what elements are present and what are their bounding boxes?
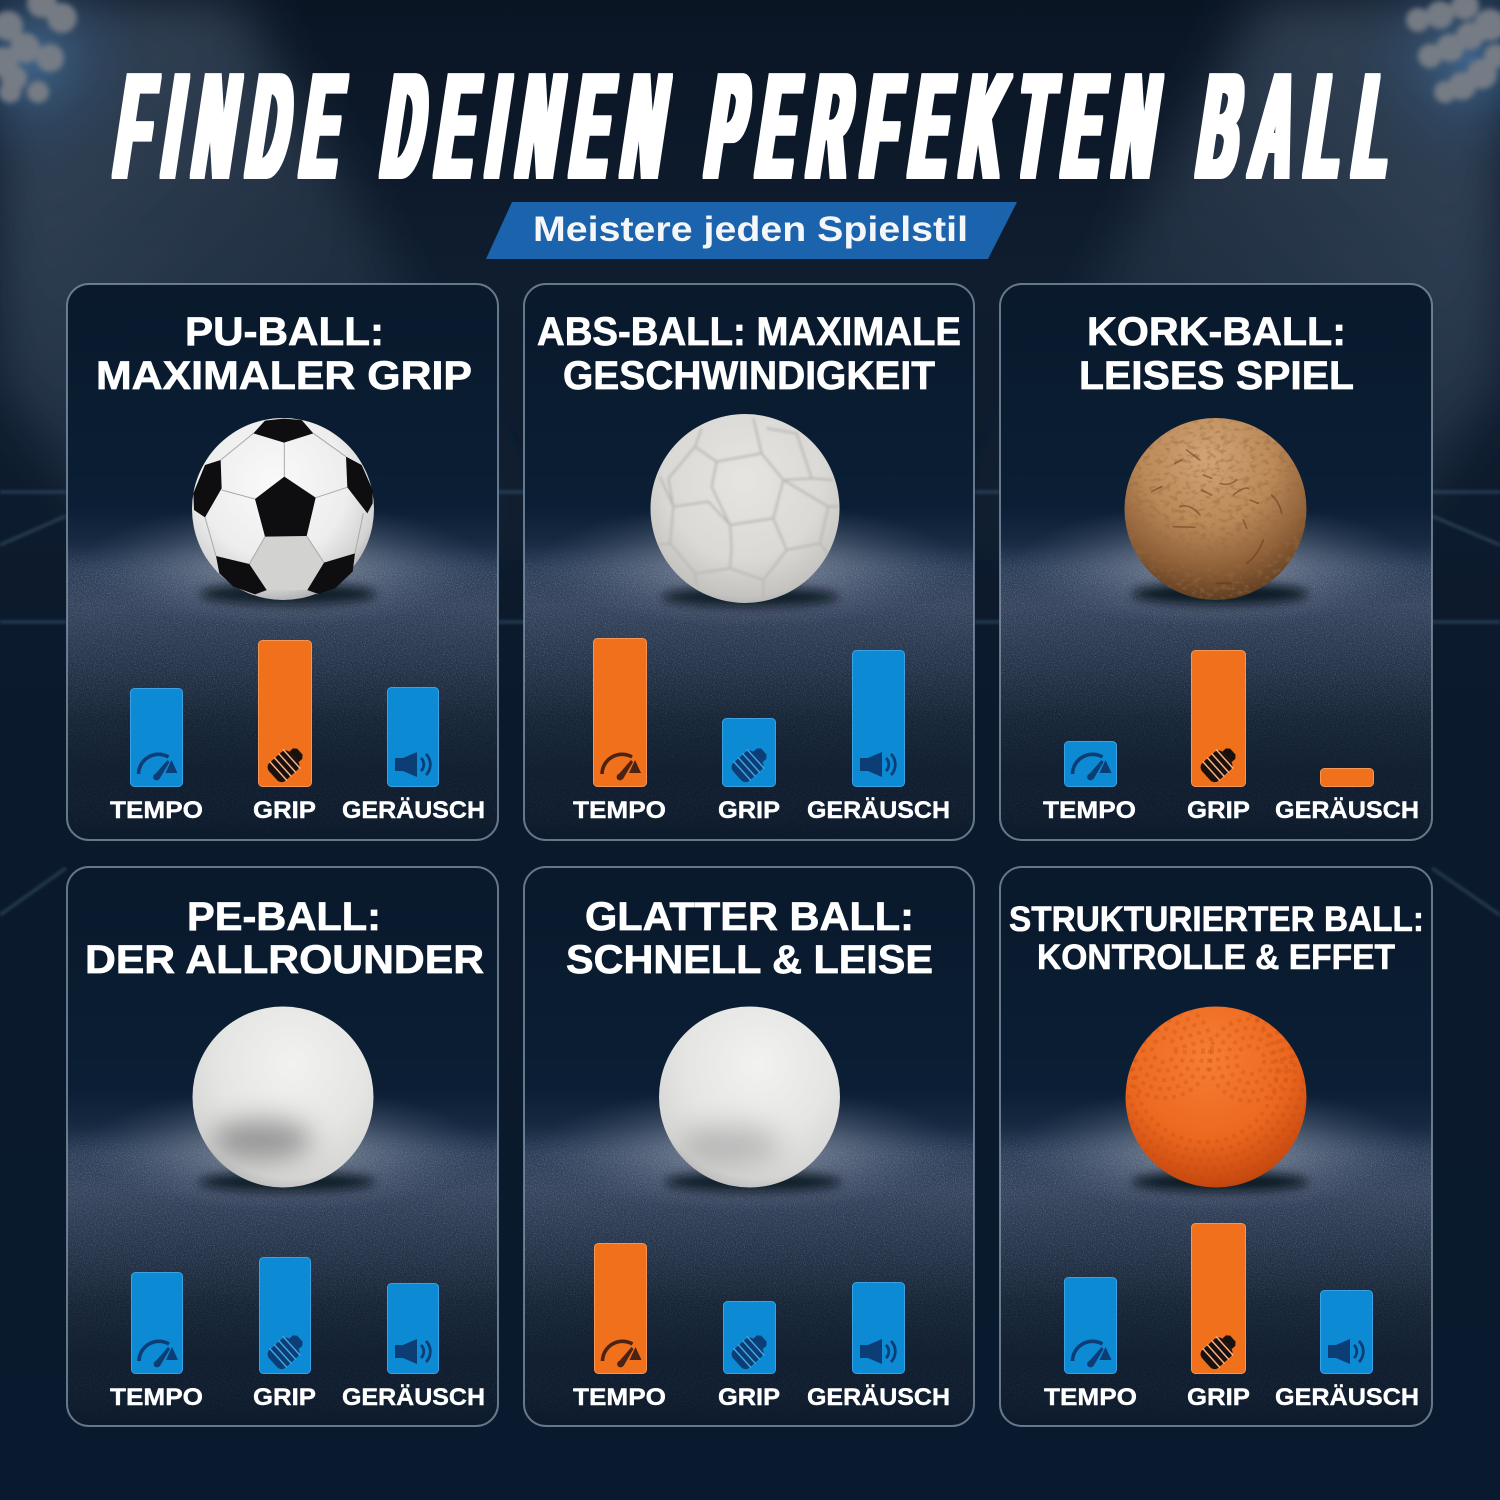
bar: tempo [573, 638, 666, 824]
heading: PE-BALL: [187, 895, 381, 939]
bar: grip [253, 1258, 316, 1411]
panel: PE-Ball [67, 867, 498, 1426]
icon: grip [728, 1329, 773, 1372]
icon: gauge [1072, 754, 1112, 780]
panel: PU-Ball [67, 284, 498, 840]
bar: tempo: TEMPO [1043, 797, 1136, 824]
bar: geraeusch: GERÄUSCH [807, 1384, 950, 1411]
bar: grip [1187, 650, 1250, 824]
bar: grip [718, 718, 780, 824]
bar: grip: GRIP [253, 1384, 316, 1411]
panel: ABS-Ball [524, 284, 974, 840]
title: FINDE DEINEN PERFEKTEN BALL [107, 43, 1403, 209]
bar: grip [718, 1302, 780, 1411]
bar: grip: GRIP [718, 797, 780, 824]
icon: speaker [860, 1339, 895, 1364]
ball: white PE ball [192, 1006, 375, 1192]
panel: glatter Ball [524, 867, 974, 1426]
ball: textured orange ball [1126, 1006, 1312, 1199]
bar: grip: GRIP [253, 797, 316, 824]
bar: grip [253, 640, 316, 824]
heading: LEISES SPIEL [1079, 354, 1354, 398]
bar: geraeusch: GERÄUSCH [342, 1384, 485, 1411]
heading: DER ALLROUNDER [85, 938, 484, 982]
bar: tempo: TEMPO [573, 797, 666, 824]
bar: grip: GRIP [718, 1384, 780, 1411]
bar: tempo [1044, 1278, 1137, 1411]
ball: white ABS ball [650, 414, 840, 607]
heading [85, 895, 484, 982]
icon: grip [728, 742, 773, 785]
panel: Kork-Ball [1000, 284, 1432, 840]
bar: tempo [573, 1244, 666, 1411]
bar: grip: GRIP [1187, 797, 1250, 824]
bar: tempo: TEMPO [573, 1384, 666, 1411]
bar: tempo [1043, 742, 1136, 824]
heading: KORK-BALL: [1087, 310, 1346, 354]
bar: geraeusch [342, 1284, 485, 1411]
subtitle banner [486, 202, 1017, 259]
heading: GLATTER BALL: [585, 895, 914, 939]
subtitle banner: Meistere jeden Spielstil [533, 210, 968, 249]
ball: cork ball [1124, 418, 1308, 605]
icon: speaker [395, 1339, 430, 1364]
icon: grip [264, 1329, 309, 1372]
bar: geraeusch [342, 688, 485, 824]
ball: smooth white ball [659, 1006, 841, 1192]
bar: tempo: TEMPO [110, 1384, 203, 1411]
heading: SCHNELL & LEISE [566, 938, 933, 982]
icon: gauge [139, 1341, 178, 1367]
icon: grip [1197, 1329, 1242, 1372]
heading: MAXIMALER GRIP [96, 354, 472, 398]
bar: geraeusch: GERÄUSCH [807, 797, 950, 824]
bar: geraeusch: GERÄUSCH [1275, 797, 1419, 824]
icon: gauge [602, 1341, 642, 1367]
bar: tempo [110, 1272, 203, 1411]
bar: geraeusch [1275, 1290, 1419, 1411]
icon: grip [1197, 742, 1242, 785]
bar: tempo [110, 688, 203, 824]
bar: grip: GRIP [1187, 1384, 1250, 1411]
bar: geraeusch [807, 650, 950, 824]
panel: strukturierter Ball [1000, 867, 1432, 1426]
ball: black and white football [192, 418, 376, 605]
heading [96, 310, 472, 398]
bar: geraeusch: GERÄUSCH [342, 797, 485, 824]
bar: tempo: TEMPO [110, 797, 203, 824]
heading: KONTROLLE & EFFET [1037, 938, 1395, 977]
icon: speaker [395, 752, 430, 777]
bar: geraeusch [1275, 768, 1419, 824]
bar: tempo: TEMPO [1044, 1384, 1137, 1411]
icon: grip [264, 742, 309, 785]
heading: GESCHWINDIGKEIT [563, 354, 935, 398]
heading [1009, 900, 1424, 977]
bar: grip [1187, 1224, 1250, 1411]
heading [1079, 310, 1354, 398]
icon: gauge [138, 754, 178, 780]
heading: STRUKTURIERTER BALL: [1009, 900, 1424, 939]
icon: speaker [860, 752, 895, 777]
heading: PU-BALL: [185, 310, 384, 354]
heading [537, 310, 961, 398]
heading: ABS-BALL: MAXIMALE [537, 310, 961, 354]
icon: gauge [1072, 1341, 1112, 1367]
bar: geraeusch: GERÄUSCH [1275, 1384, 1419, 1411]
icon: gauge [602, 754, 641, 780]
icon: speaker [1328, 1339, 1363, 1364]
bar: geraeusch [807, 1282, 950, 1411]
heading [566, 895, 933, 982]
